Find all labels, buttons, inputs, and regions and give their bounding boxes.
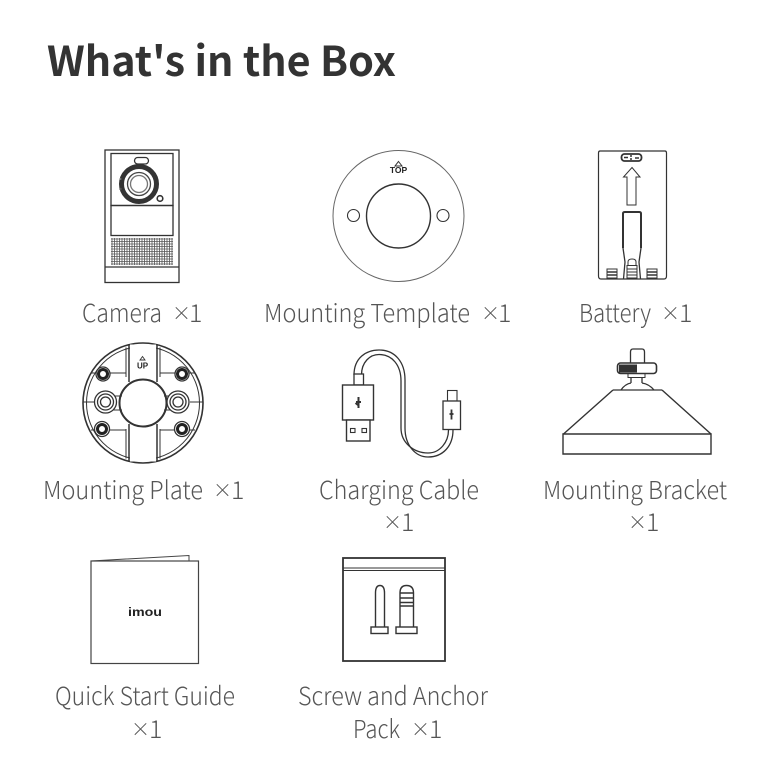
icon: mounting plate <box>83 343 203 463</box>
label: mounting template: × <box>481 299 500 326</box>
label: quick start guide <box>55 677 235 746</box>
label: screw and anchor pack <box>298 677 489 746</box>
label: mounting template: 1 <box>498 294 511 330</box>
label: quick start guide: × <box>131 715 150 742</box>
label: quick start guide: 1 <box>149 710 162 746</box>
label: battery: × <box>661 299 680 326</box>
label: camera: 1 <box>189 294 202 330</box>
label: quick start guide: Quick Start Guide <box>55 677 235 713</box>
label: mounting bracket: 1 <box>646 503 659 539</box>
icon: mounting template: TOP <box>390 165 407 175</box>
icon: camera <box>105 150 179 282</box>
label: screw and anchor pack: 1 <box>429 710 442 746</box>
title: What's in the Box <box>47 28 396 88</box>
label: mounting bracket: × <box>628 508 647 535</box>
icon: mounting template <box>333 150 464 282</box>
label: mounting plate: Mounting Plate <box>43 471 203 507</box>
label: mounting plate: × <box>213 476 232 503</box>
label: camera: Camera <box>82 294 162 330</box>
icon: battery <box>598 151 666 279</box>
icon: quick start guide <box>91 556 198 664</box>
label: charging cable: × <box>383 508 402 535</box>
label: screw and anchor pack: × <box>411 715 430 742</box>
label: charging cable: 1 <box>401 503 414 539</box>
label: battery: 1 <box>679 294 692 330</box>
label: camera: × <box>172 299 191 326</box>
icon: quick start guide: imou <box>128 607 162 619</box>
label: mounting template: Mounting Template <box>264 294 470 330</box>
label: mounting bracket <box>543 471 727 539</box>
label: screw and anchor pack: Screw and Anchor <box>298 677 489 713</box>
label: battery: Battery <box>579 294 651 330</box>
icon: mounting plate: UP <box>137 362 149 370</box>
label: mounting plate: 1 <box>231 471 244 507</box>
icon: screw and anchor pack <box>343 558 445 661</box>
label: charging cable <box>319 471 479 539</box>
icon: charging cable <box>342 350 460 457</box>
label: screw and anchor pack: Pack <box>353 710 400 746</box>
label: mounting bracket: Mounting Bracket <box>543 471 727 507</box>
icon: mounting bracket <box>563 349 711 454</box>
label: charging cable: Charging Cable <box>319 471 479 507</box>
